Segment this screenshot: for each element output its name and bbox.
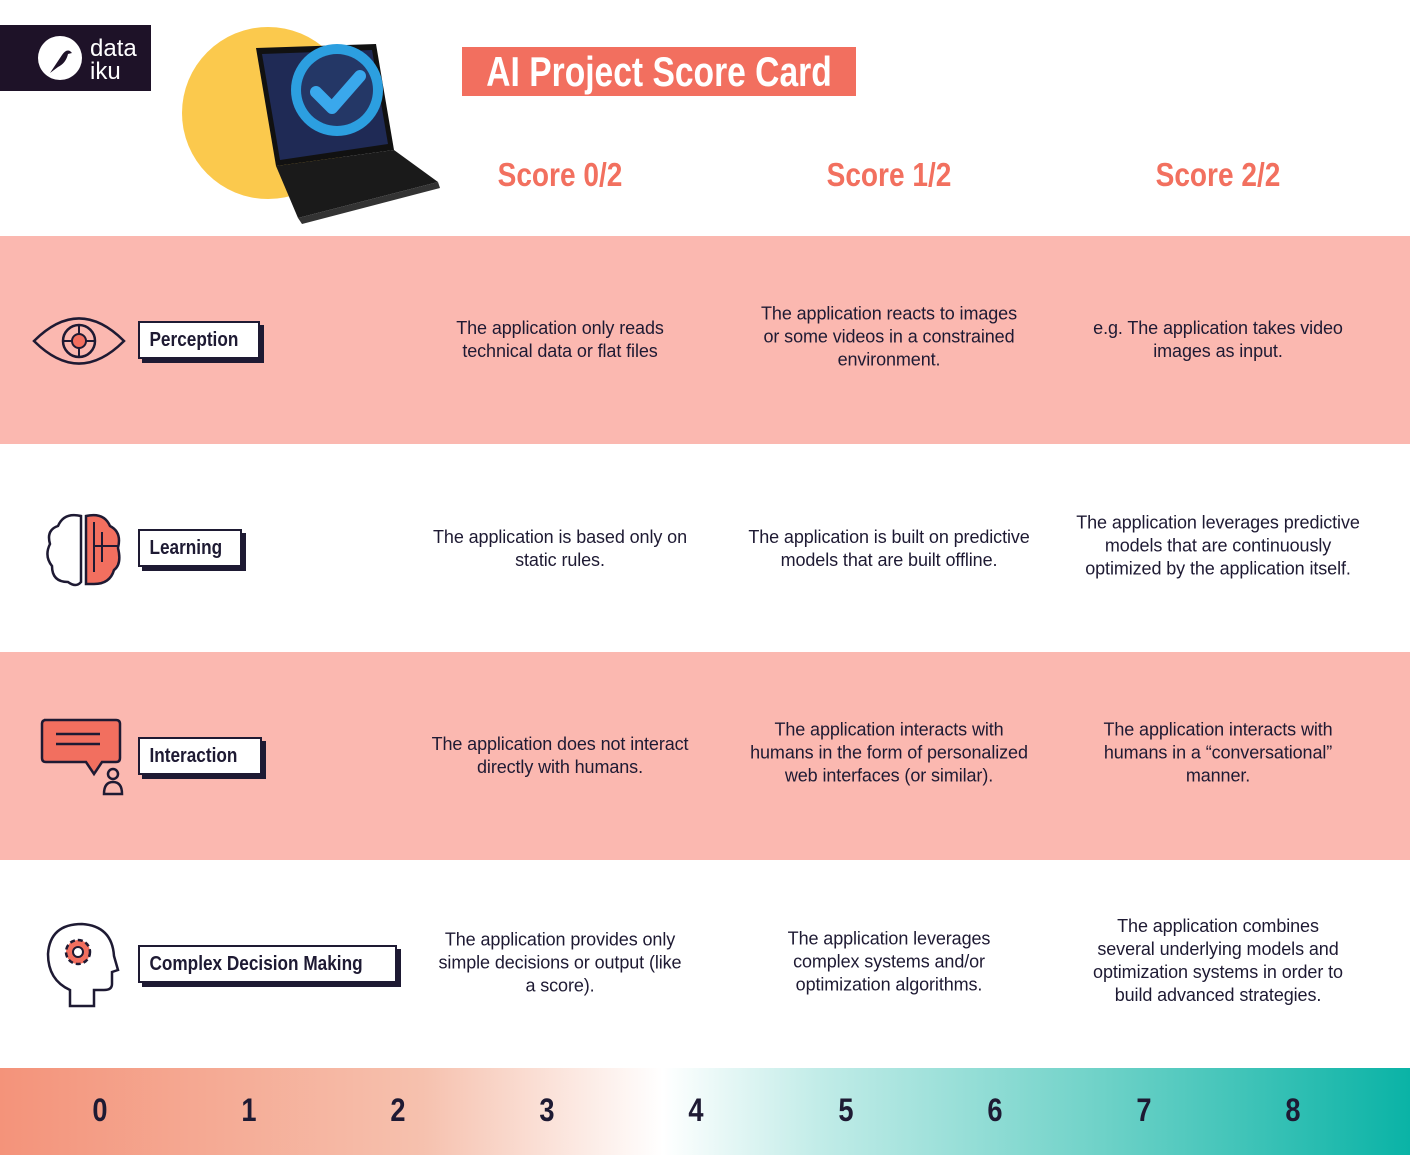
text cells: The application only reads — [456, 318, 664, 338]
text cells: a score). — [525, 976, 595, 996]
panel: learning: models that are continuously — [1105, 536, 1331, 556]
scale bar 0-8: 0 — [92, 1092, 108, 1128]
panel: interaction: humans in the form of personalized — [750, 742, 1028, 762]
text cells: The application is based only on — [433, 527, 687, 547]
text cells — [456, 318, 664, 361]
panel: complex decision making — [46, 916, 1343, 1008]
scale bar 0-8: 5 — [838, 1092, 854, 1128]
text cells: technical data or flat files — [462, 341, 658, 361]
panel: interaction: humans in a “conversational” — [1104, 742, 1332, 762]
text cells: static rules. — [515, 550, 605, 570]
logo: dataiku — [0, 25, 151, 91]
panel: complex decision making: optimization systems in order to — [1093, 962, 1343, 982]
text: Score 1/2 — [827, 156, 951, 193]
text cells — [439, 930, 681, 996]
label: Perception — [149, 329, 238, 351]
panel: perception: The application reacts to images — [761, 304, 1017, 324]
score headers: Score 0/2 — [498, 156, 622, 193]
scale bar 0-8: 7 — [1136, 1092, 1152, 1128]
panel: learning: models that are built offline. — [781, 550, 997, 570]
logo: dataiku: iku — [90, 58, 121, 85]
panel: complex decision making: build advanced strategies. — [1115, 985, 1321, 1005]
text cells: directly with humans. — [477, 757, 643, 777]
panel: learning: The application leverages predictive — [1076, 512, 1360, 532]
label — [138, 945, 397, 983]
logo: dataiku: data — [90, 35, 137, 62]
text cells: simple decisions or output (like — [439, 952, 681, 972]
label — [138, 737, 262, 775]
scale bar 0-8: 6 — [987, 1092, 1003, 1128]
panel: perception: or some videos in a constrained — [763, 326, 1015, 346]
title: AI Project Score Card — [486, 48, 832, 95]
scale bar 0-8: 2 — [390, 1092, 406, 1128]
panel: complex decision making: several underlying models and — [1097, 939, 1339, 959]
panel: interaction: manner. — [1186, 766, 1250, 786]
panel: complex decision making: complex systems and/or — [793, 952, 985, 972]
text cells — [433, 527, 687, 570]
scale bar 0-8: 8 — [1285, 1092, 1301, 1128]
scale bar 0-8 — [0, 1068, 1410, 1155]
panel: perception — [0, 236, 1410, 444]
panel: complex decision making: The application leverages — [788, 928, 990, 948]
label: Interaction — [149, 745, 237, 767]
panel: perception: images as input. — [1153, 341, 1283, 361]
text: Score 2/2 — [1156, 156, 1280, 193]
panel: complex decision making: The application combines — [1117, 916, 1319, 936]
panel: perception: e.g. The application takes video — [1093, 318, 1343, 338]
icon: brain — [46, 514, 121, 586]
panel: complex decision making: optimization algorithms. — [796, 974, 982, 994]
icon: eye — [32, 317, 126, 365]
text cells: The application provides only — [445, 930, 675, 950]
panel: interaction: web interfaces (or similar). — [785, 766, 993, 786]
label: Complex Decision Making — [149, 953, 363, 975]
text cells — [432, 734, 688, 777]
panel: interaction: The application interacts with — [1103, 720, 1333, 740]
icon: head with gear — [46, 922, 120, 1008]
icon: chat bubble with person — [40, 718, 124, 796]
panel: interaction: The application interacts with — [774, 720, 1004, 740]
text cells: The application does not interact — [432, 734, 688, 754]
label — [138, 321, 260, 359]
panel: interaction — [0, 652, 1410, 860]
scale bar 0-8: 3 — [539, 1092, 555, 1128]
panel: learning — [46, 512, 1360, 586]
illustration: laptop with checkmark — [182, 27, 440, 224]
panel: learning: optimized by the application itself. — [1085, 558, 1351, 578]
scale bar 0-8: 1 — [241, 1092, 257, 1128]
label — [138, 529, 242, 567]
label: Learning — [149, 537, 222, 559]
panel: perception: environment. — [838, 350, 940, 370]
scale bar 0-8: 4 — [688, 1092, 704, 1128]
panel: learning: The application is built on predictive — [748, 527, 1030, 547]
